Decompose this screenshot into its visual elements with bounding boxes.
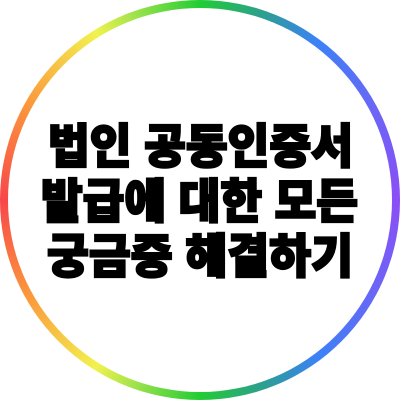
title line 3: 궁금증 해결하기 <box>47 230 353 283</box>
title line 1: 법인 공동인증서 <box>48 120 353 173</box>
title line 2: 발급에 대한 모든 <box>41 175 358 228</box>
